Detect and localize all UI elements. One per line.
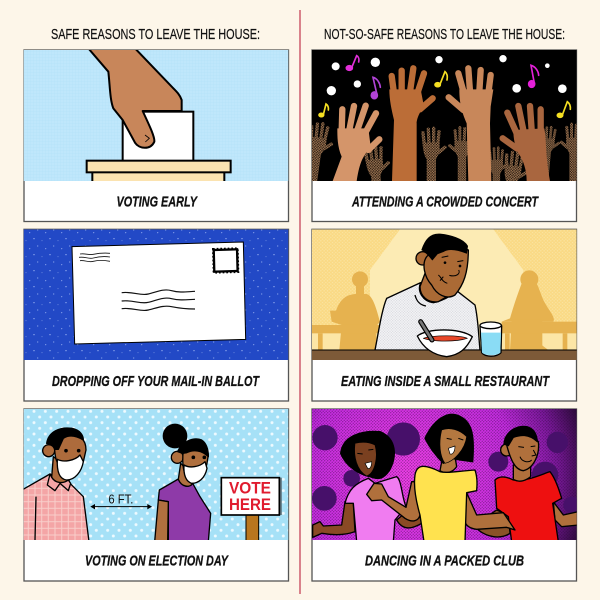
sign: vote here: HERE: [229, 496, 271, 514]
heading: safe reasons: SAFE REASONS TO LEAVE THE HOUSE:: [51, 27, 260, 43]
icon: ballot paper: [123, 112, 193, 161]
icon: ballot box: [86, 160, 232, 181]
icon: envelope: [72, 242, 246, 344]
caption: packed club: DANCING IN A PACKED CLUB: [365, 552, 524, 570]
illustration: man eating: [375, 234, 480, 350]
hand 1: [333, 106, 379, 181]
hand 4: [503, 106, 550, 181]
dancer: left: [313, 431, 406, 542]
caption: voting early: VOTING EARLY: [116, 194, 198, 210]
icon: water glass: [480, 322, 502, 356]
caption: voting on election day: VOTING ON ELECTION DAY: [85, 552, 229, 570]
panel: crowded concert: [311, 49, 578, 222]
panel: packed club: [312, 409, 580, 581]
hand 2: [389, 68, 433, 181]
dark club lights: [312, 422, 580, 513]
sign: vote here: [221, 478, 281, 541]
panel: voting early: [24, 48, 288, 221]
icon: hand dropping ballot: [88, 48, 182, 148]
silhouette: diners: [312, 270, 577, 350]
background crowd hands: [312, 122, 577, 181]
table: [310, 350, 580, 361]
panel: mail-in ballot: [24, 229, 288, 401]
icon: soup bowl and spoon: [417, 322, 472, 357]
dancer: right: [478, 426, 578, 542]
panel: small restaurant: [310, 229, 580, 401]
dancer: center: [367, 414, 515, 542]
panel: voting on election day: [22, 409, 288, 581]
illustration: masked woman: [155, 424, 211, 542]
music notes: [319, 56, 570, 117]
white lights: [327, 55, 567, 95]
hand 3: [449, 68, 493, 181]
sign: vote here: VOTE: [229, 479, 271, 497]
caption: mail-in ballot: DROPPING OFF YOUR MAIL-IN BALLOT: [52, 373, 260, 390]
illustration: masked man: [22, 428, 89, 542]
label: six feet distance arrow: 6 FT.: [108, 492, 133, 506]
label: six feet distance arrow: [90, 494, 152, 510]
